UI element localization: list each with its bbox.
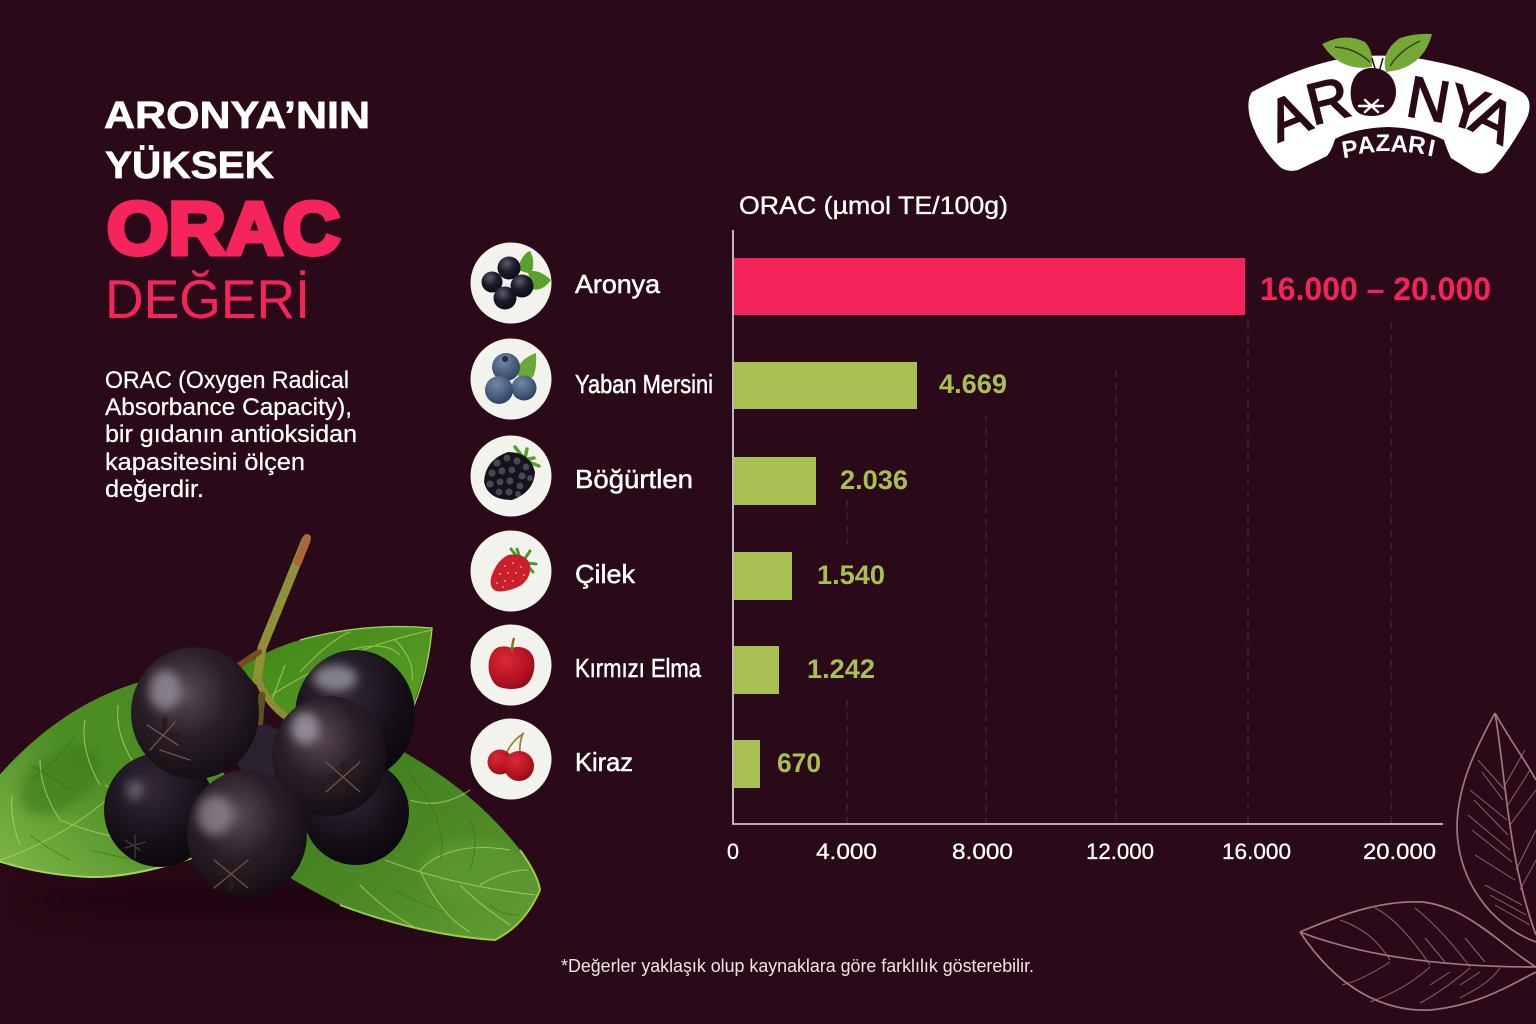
axis tick labels: 20.000	[1363, 839, 1436, 864]
logo letters: R	[1300, 64, 1356, 138]
bar: Böğürtlen	[734, 457, 908, 505]
logo letters: A	[1259, 79, 1319, 154]
icon: aronia	[470, 242, 552, 324]
upper right leaf	[240, 626, 432, 745]
row labels: Yaban Mersini	[575, 369, 713, 399]
logo leaves	[1322, 34, 1432, 72]
icon: blueberry	[470, 338, 552, 420]
logo subtitle: Z	[1375, 130, 1390, 157]
icon: apple	[470, 624, 552, 706]
description text: kapasitesini ölçen	[105, 449, 305, 476]
row labels: Kırmızı Elma	[575, 653, 701, 683]
description text: ORAC (Oxygen Radical	[105, 367, 349, 394]
logo letters	[1259, 64, 1525, 157]
axis tick labels: 12.000	[1086, 839, 1154, 864]
bar: Kiraz: 670	[777, 748, 821, 778]
bar: Yaban Mersini	[734, 362, 1007, 409]
front berries	[131, 647, 386, 898]
bar: Çilek: 1.540	[817, 560, 885, 590]
description text	[105, 367, 357, 503]
logo subtitle	[1340, 130, 1437, 164]
heading: Aronya'nın: ARONYA’NIN	[104, 95, 370, 137]
axis title: ORAC (µmol TE/100g)	[739, 192, 1008, 220]
axis tick labels: 8.000	[952, 839, 1013, 864]
description text: değerdir.	[105, 476, 204, 503]
logo subtitle: R	[1407, 131, 1427, 160]
axis tick labels	[727, 839, 1436, 864]
axes	[733, 230, 1443, 824]
axis tick labels: 0	[727, 839, 739, 864]
icon: cherries	[470, 718, 552, 800]
back berries	[104, 650, 415, 867]
bar: Kırmızı Elma: 1.242	[807, 654, 875, 684]
logo: Aronya Pazarı	[1248, 34, 1530, 174]
stem	[238, 538, 307, 775]
bar: Aronya	[734, 258, 1491, 315]
heading: Değeri: DEĞERİ	[105, 268, 310, 330]
row labels: Aronya	[575, 269, 661, 299]
bar: Kiraz	[734, 740, 821, 788]
logo letters: Y	[1440, 72, 1496, 145]
row labels: Böğürtlen	[575, 464, 693, 494]
heading: Yüksek: YÜKSEK	[105, 144, 275, 187]
icon: blackberry	[470, 436, 552, 516]
description text: bir gıdanın antioksidan	[105, 421, 357, 448]
logo subtitle: P	[1340, 135, 1360, 164]
row labels	[575, 269, 713, 777]
row labels: Kiraz	[575, 747, 633, 777]
bar: Yaban Mersini: 4.669	[939, 369, 1007, 399]
lower right leaf	[278, 742, 540, 940]
logo letters: N	[1402, 64, 1455, 135]
bar: Aronya: 16.000 – 20.000	[1260, 271, 1491, 307]
logo badge	[1248, 56, 1530, 174]
logo berry	[1351, 68, 1396, 116]
footnote: *Değerler yaklaşık olup kaynaklara göre farklılık gösterebilir.	[561, 956, 1034, 976]
bar: Çilek	[734, 552, 885, 600]
illustration: aronia berry cluster with leaves	[0, 538, 540, 940]
axis tick labels: 4.000	[816, 839, 877, 864]
logo letters: A	[1462, 82, 1525, 157]
logo subtitle: A	[1390, 131, 1409, 158]
description text: Absorbance Capacity),	[105, 394, 352, 421]
left leaf	[0, 682, 230, 877]
axis tick labels: 16.000	[1222, 839, 1291, 864]
logo subtitle: I	[1426, 135, 1437, 163]
bar: Böğürtlen: 2.036	[840, 465, 908, 495]
title block	[104, 95, 370, 330]
bar: Kırmızı Elma	[734, 646, 875, 694]
icon: strawberry	[470, 530, 552, 612]
decorative leaf illustration	[1300, 713, 1536, 1010]
row labels: Çilek	[575, 559, 636, 589]
logo subtitle: A	[1356, 131, 1376, 160]
heading: ORAC: ORAC	[107, 187, 340, 270]
chart: ORAC bar chart	[727, 192, 1491, 864]
